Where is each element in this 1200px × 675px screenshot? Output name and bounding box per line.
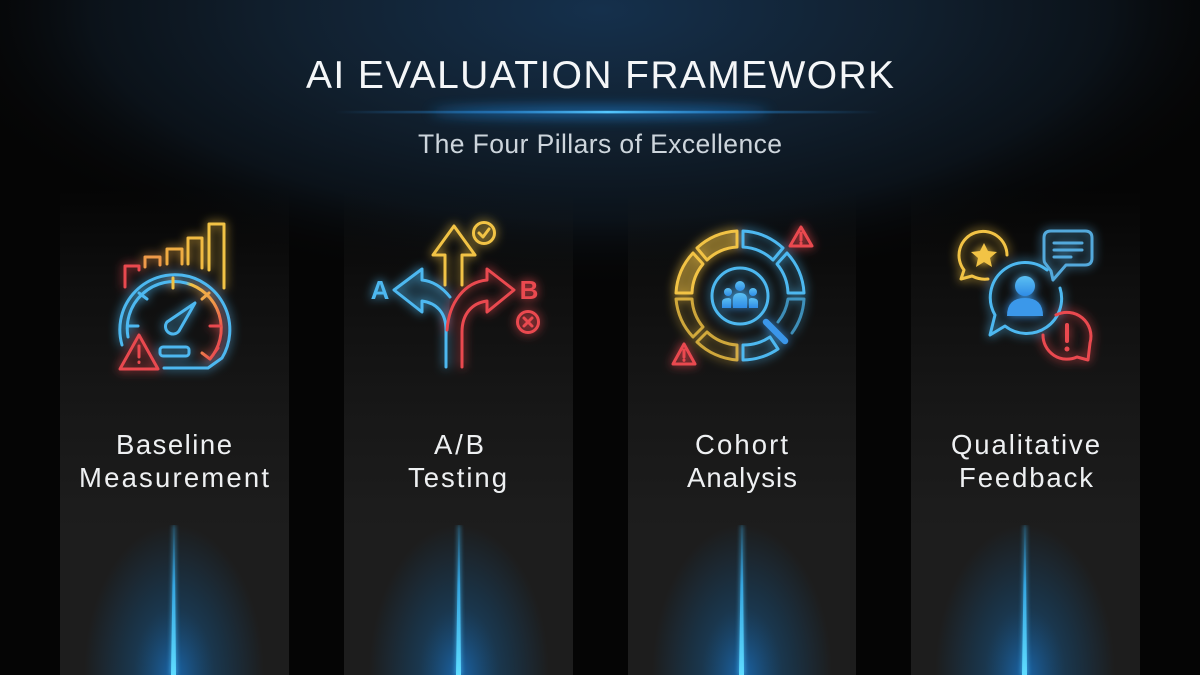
icon: feedback speech bubbles (959, 231, 1092, 360)
label: a/b testing: A/B (434, 429, 484, 460)
icon: cohort ring with magnifier (673, 227, 812, 364)
panel: baseline measurement (60, 190, 289, 675)
label: cohort analysis: Cohort (695, 429, 788, 460)
icon: gauge with bars (120, 224, 230, 369)
panel: a/b testing (344, 190, 573, 675)
label: qualitative feedback (951, 429, 1100, 493)
icon: a/b split arrows: A (371, 275, 390, 305)
label: baseline measurement: Baseline (116, 429, 232, 460)
panel: cohort analysis (628, 190, 856, 675)
label: cohort analysis: Analysis (687, 462, 797, 493)
subtitle: The Four Pillars of Excellence (418, 129, 782, 159)
label: cohort analysis (687, 429, 797, 493)
label: qualitative feedback: Feedback (959, 462, 1093, 493)
label: baseline measurement (79, 429, 269, 493)
label: a/b testing: Testing (408, 462, 507, 493)
glowing divider (335, 106, 880, 118)
title: AI EVALUATION FRAMEWORK (306, 54, 894, 97)
label: a/b testing (408, 429, 507, 493)
icon: a/b split arrows: B (520, 275, 538, 305)
panel: qualitative feedback (911, 190, 1140, 675)
label: baseline measurement: Measurement (79, 462, 269, 493)
icon: a/b split arrows (371, 222, 538, 367)
label: qualitative feedback: Qualitative (951, 429, 1100, 460)
